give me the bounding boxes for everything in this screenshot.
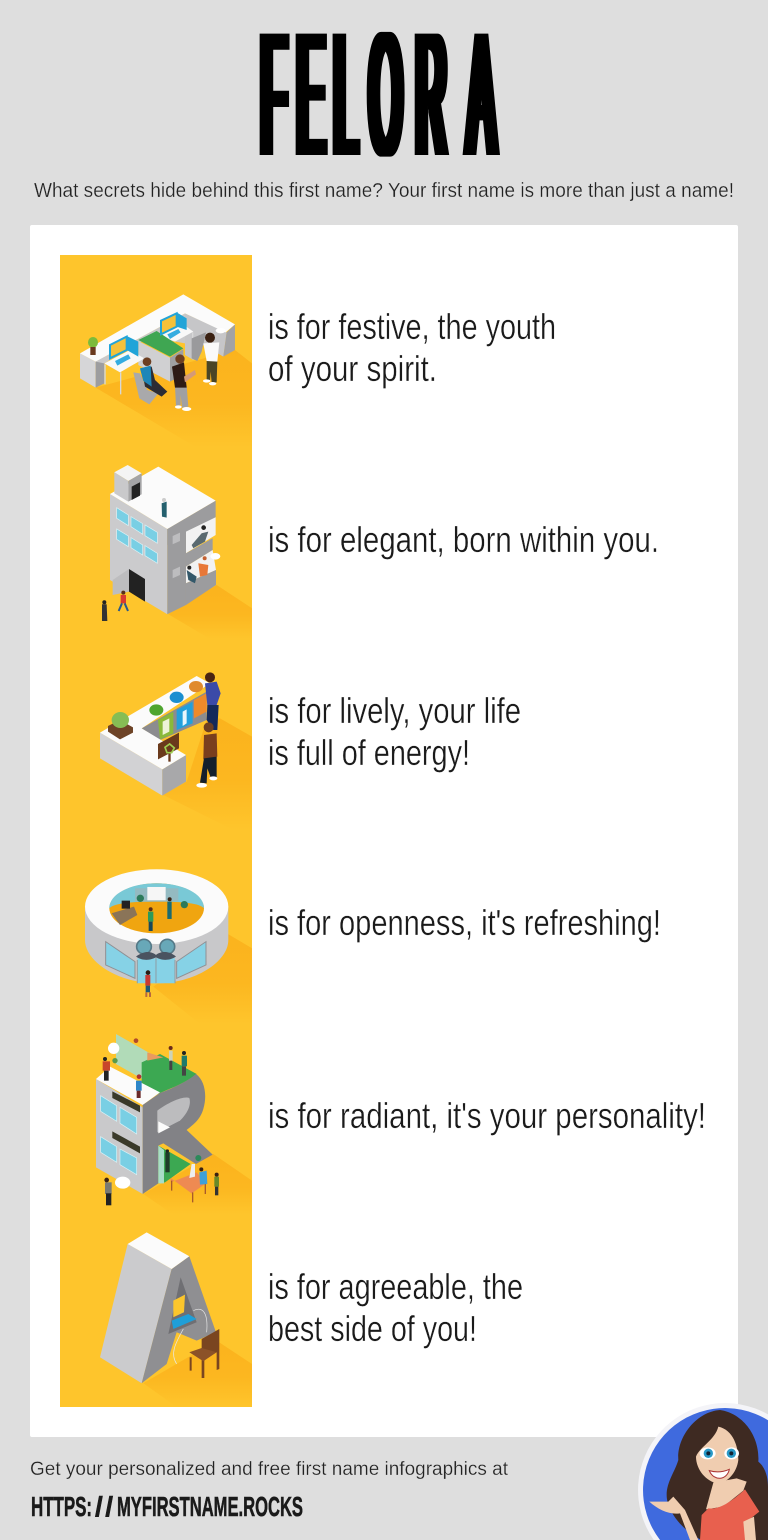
body text: F: of your spirit. xyxy=(268,348,437,389)
title: FELORA xyxy=(261,0,495,191)
body text: A: is for agreeable, the xyxy=(268,1266,523,1307)
icon: office letter F xyxy=(80,294,252,448)
body text: L xyxy=(268,690,521,773)
person standing centre xyxy=(172,354,196,411)
man in blue xyxy=(205,672,221,730)
icon: avatar xyxy=(638,1403,768,1540)
body text: L: is full of energy! xyxy=(268,732,470,773)
body text: O: is for openness, it's refreshing! xyxy=(268,902,661,943)
footer call to action: Get your personalized and free first name infographics at xyxy=(30,1459,509,1480)
body text: E: is for elegant, born within you. xyxy=(268,519,659,560)
panel: white card xyxy=(30,225,738,1437)
man in brown xyxy=(196,722,217,788)
icon: building letter E xyxy=(102,465,252,639)
icon: letter R building xyxy=(96,1034,252,1215)
footer url: HTTPS: xyxy=(31,1491,92,1522)
footer url: // xyxy=(95,1491,113,1522)
person seated xyxy=(133,357,167,404)
body text: A xyxy=(268,1266,523,1349)
person standing right xyxy=(203,333,219,385)
icon: recycling counter letter L xyxy=(100,672,252,830)
footer url: MYFIRSTNAME.ROCKS xyxy=(117,1491,303,1522)
body text: A: best side of you! xyxy=(268,1308,477,1349)
icon: optician ring letter O xyxy=(85,869,252,1024)
body text: L: is for lively, your life xyxy=(268,690,521,731)
body text: F xyxy=(268,306,556,389)
person in red xyxy=(119,591,128,611)
chair xyxy=(189,1329,219,1378)
person with speech bubble xyxy=(104,1177,130,1205)
icon: letter A with chair xyxy=(100,1232,252,1407)
person in doorway xyxy=(145,970,151,997)
glasses and moustache xyxy=(136,939,176,960)
person with bag xyxy=(102,600,107,621)
panel: yellow illustration strip xyxy=(60,255,252,1407)
body text: F: is for festive, the youth xyxy=(268,306,556,347)
rooftop people and speech bubbles xyxy=(103,1038,187,1098)
subtitle: What secrets hide behind this first name? Your first name is more than just a name! xyxy=(34,180,734,202)
